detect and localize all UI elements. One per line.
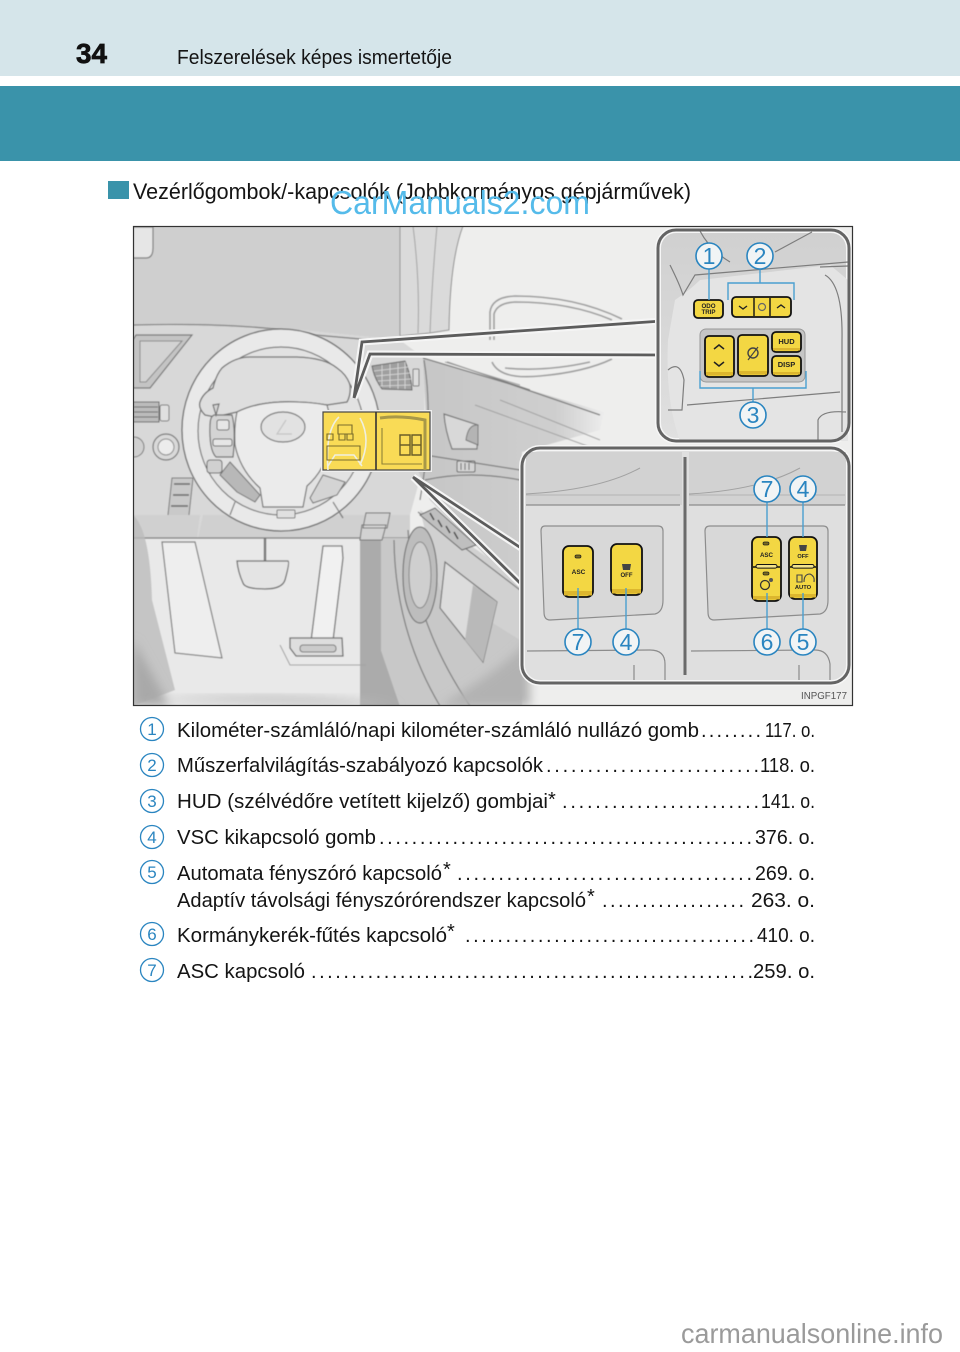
marker 7 right: 7 [761, 476, 773, 502]
console shade [360, 538, 400, 706]
marker 6: 6 [761, 629, 773, 655]
steering wheel [182, 329, 390, 540]
item 1: Kilométer-számláló/napi kilométer-számláló nullázó gomb [177, 720, 699, 742]
item 5: * [587, 886, 595, 908]
marker 1: 1 [703, 243, 715, 269]
item 2: 2 [147, 756, 157, 775]
leader lines lower [578, 502, 803, 629]
lower dash band [166, 514, 190, 525]
VSC OFF button left: OFF [620, 573, 633, 579]
item 7: 7 [147, 961, 157, 980]
item 7: 259. o. [753, 961, 815, 983]
ODO TRIP button [694, 300, 723, 318]
marker 7 right [754, 476, 780, 502]
item 6: .................................... [465, 925, 754, 947]
floor [146, 539, 359, 540]
marker 7 left: 7 [572, 629, 584, 655]
inner spoke area [198, 347, 364, 515]
section marker square [108, 181, 129, 199]
bottom watermark: carmanualsonline.info [681, 1318, 943, 1349]
item 5: 269. o. [755, 863, 815, 885]
marker 4 left: 4 [620, 629, 633, 655]
lower left spoke [220, 462, 260, 502]
VSC OFF and AUTO button: AUTO [795, 585, 812, 591]
marker 7 left [565, 629, 591, 655]
ASC button left [563, 546, 593, 597]
DISP button: DISP [778, 360, 795, 369]
door pocket [440, 562, 497, 662]
marker 6 [754, 629, 780, 655]
marker 2: 2 [754, 243, 766, 269]
marker 5 [790, 629, 816, 655]
VSC OFF and AUTO button [789, 537, 817, 599]
chapter title: Felszerelések képes ismertetője [177, 47, 452, 69]
marker 3: 3 [747, 402, 759, 428]
recessed switch bank [700, 329, 805, 382]
item 6: Kormánykerék-fűtés kapcsoló [177, 925, 447, 947]
ASC and wheel heater button: ASC [760, 552, 774, 559]
window switch strip [420, 508, 476, 550]
A pillar [400, 226, 463, 336]
upper inset panel [658, 230, 849, 441]
ODO TRIP button: TRIP [701, 309, 716, 316]
leader lines upper [700, 269, 806, 402]
item 4: .............................................. [379, 827, 752, 849]
HUD button [772, 332, 801, 352]
item 5: 263. o. [751, 890, 815, 912]
item 6 [140, 921, 815, 947]
item 7 [140, 958, 815, 983]
page number: 34 [76, 38, 107, 69]
page header text [76, 38, 691, 204]
item 4: 4 [147, 828, 157, 847]
teal section band [0, 86, 960, 161]
upper opening [200, 357, 350, 417]
item 5: .................................... [457, 863, 752, 885]
side mirror [490, 296, 622, 377]
marker 4 left [613, 629, 639, 655]
ODO TRIP button: ODO [701, 303, 716, 310]
right switch recess [705, 526, 828, 620]
highlighted switch area [322, 411, 431, 471]
item 6: 410. o. [757, 925, 815, 947]
ASC and wheel heater button [752, 537, 781, 601]
VSC OFF button left [611, 544, 642, 595]
marker 5: 5 [797, 629, 809, 655]
item 7: ....................................................... [311, 961, 753, 983]
item 2 [140, 754, 815, 777]
item 3: 3 [147, 792, 157, 811]
rear-view mirror [133, 227, 153, 258]
VSC OFF and AUTO button: OFF [797, 554, 809, 560]
wheel hub [235, 402, 331, 507]
item 3: * [548, 789, 556, 811]
item 4: 376. o. [755, 827, 815, 849]
item 5: * [443, 859, 451, 881]
ASC button left: ASC [572, 569, 586, 576]
HUD button: HUD [778, 337, 795, 346]
cockpit background [124, 226, 853, 706]
marker 2 [747, 243, 773, 269]
section heading: Vezérlőgombok/-kapcsolók (Jobbkormányos gépjárművek) [133, 179, 691, 204]
centre screen [133, 335, 192, 388]
left wheel switches [210, 404, 234, 457]
item 5 [140, 859, 815, 912]
lower right spoke [310, 475, 345, 503]
DISP button [772, 356, 801, 376]
item 5: Automata fényszóró kapcsoló [177, 863, 442, 885]
door panel [419, 358, 594, 577]
header band [0, 0, 960, 76]
emblem [261, 412, 305, 442]
HUD mode button [738, 335, 768, 376]
upper callout pointer [354, 321, 662, 398]
item 7: ASC kapcsoló [177, 961, 305, 983]
item 2: Műszerfalvilágítás-szabályozó kapcsolók [177, 755, 544, 777]
item 1: 1 [147, 720, 157, 739]
item 5: .................. [602, 890, 744, 912]
lower vignette [134, 648, 172, 705]
item 6: 6 [147, 925, 157, 944]
centre vents and controls [134, 401, 194, 516]
lower callout pointer [413, 477, 524, 587]
item 3 [140, 789, 815, 813]
item 3: 141. o. [761, 791, 815, 813]
left switch recess [541, 526, 663, 620]
marker 1 [696, 243, 722, 269]
illustration frame [134, 226, 852, 706]
item 5: 5 [147, 863, 157, 882]
item 1 [140, 718, 815, 742]
item 5: Adaptív távolsági fényszórórendszer kapcsoló [177, 890, 586, 912]
marker 3 [740, 402, 766, 428]
door speaker [403, 527, 437, 623]
left footwell panel [162, 542, 222, 658]
brake pedal [264, 538, 266, 561]
marker 4 right [790, 476, 816, 502]
accelerator pedal [311, 546, 343, 641]
item 1: 117. o. [765, 720, 815, 742]
item 3: ........................ [562, 791, 759, 813]
HUD adjust button [705, 336, 734, 377]
door handle [444, 414, 478, 449]
image code: INPGF177 [801, 690, 847, 702]
right air vent [372, 361, 419, 390]
item 2: 118. o. [760, 755, 815, 777]
illustration: cockpit with switch callouts [132, 226, 854, 706]
dashboard [133, 324, 425, 540]
top watermark: CarManuals2.com [330, 184, 590, 221]
panel divider [684, 457, 686, 675]
windshield [133, 226, 402, 340]
item 3: HUD (szélvédőre vetített kijelző) gombjai [177, 791, 548, 813]
item 4 [140, 826, 815, 849]
item 4: VSC kikapcsoló gomb [177, 827, 376, 849]
item 6: * [447, 921, 455, 943]
lower inset panel [522, 448, 849, 683]
item 2: .......................... [546, 755, 759, 777]
illumination buttons [732, 297, 791, 317]
door sill [381, 538, 522, 706]
item 1: ........ [701, 720, 761, 742]
marker 4 right: 4 [797, 476, 810, 502]
